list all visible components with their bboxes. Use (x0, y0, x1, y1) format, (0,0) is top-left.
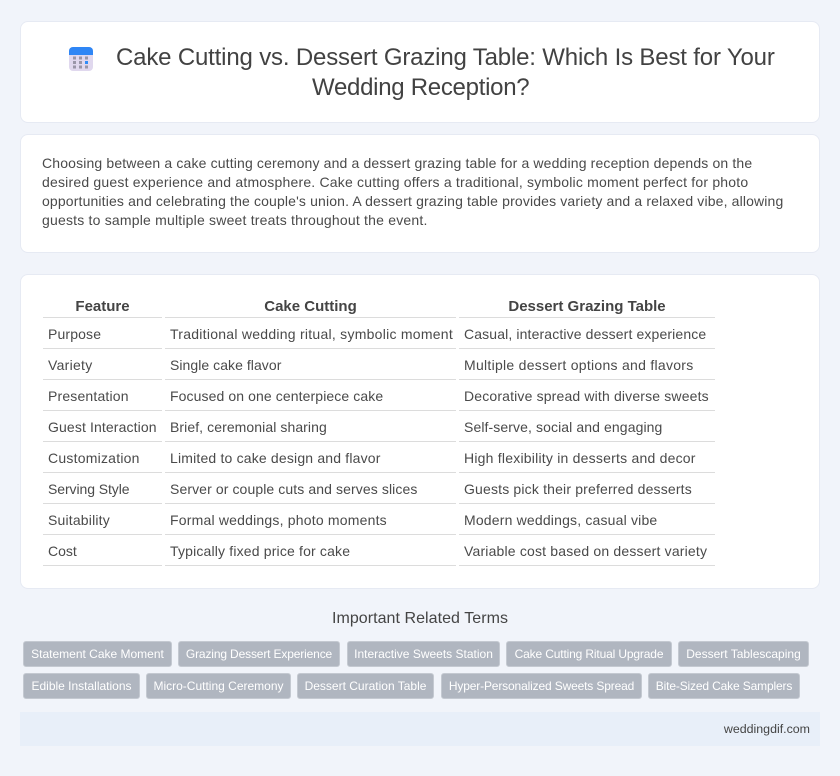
intro text: guests to sample multiple sweet treats throughout the event. (42, 212, 428, 228)
related term chips: Interactive Sweets Station (354, 647, 493, 661)
row: Customization: Customization (48, 450, 140, 466)
related term chips: Bite-Sized Cake Samplers (656, 679, 792, 693)
related terms heading: Important Related Terms (332, 610, 508, 627)
row: Customization: Limited to cake design and flavor (170, 450, 381, 466)
row: Serving Style: Serving Style (48, 481, 129, 497)
icon: calendar (69, 47, 93, 71)
row: Variety (48, 357, 694, 373)
row: Variety: Single cake flavor (170, 357, 281, 373)
row: Suitability: Formal weddings, photo moments (170, 512, 387, 528)
intro card (20, 134, 820, 253)
related term chips: Dessert Curation Table (305, 679, 426, 693)
intro text: desired guest experience and atmosphere. Cake cutting offers a traditional, symbolic moment perfect for photo (42, 174, 748, 190)
row: Purpose: Casual, interactive dessert experience (464, 326, 706, 342)
row: Customization: High flexibility in desserts and decor (464, 450, 696, 466)
row: Serving Style: Guests pick their preferred desserts (464, 481, 692, 497)
row: Purpose: Purpose (48, 326, 101, 342)
related term chips: Grazing Dessert Experience (186, 647, 332, 661)
related term chips: Edible Installations (31, 679, 132, 693)
row: Variety: Multiple dessert options and flavors (464, 357, 694, 373)
footer source: weddingdif.com (724, 722, 810, 736)
related term chips: Statement Cake Moment (31, 647, 164, 661)
table header: Cake Cutting (264, 298, 357, 315)
comparison table (43, 298, 715, 566)
related term chips: Micro-Cutting Ceremony (153, 679, 284, 693)
row: Guest Interaction: Guest Interaction (48, 419, 157, 435)
row: Presentation: Focused on one centerpiece cake (170, 388, 383, 404)
row: Customization (48, 450, 696, 466)
title: Cake Cutting vs. Dessert Grazing Table: Which Is Best for Your (116, 44, 775, 71)
table header: Dessert Grazing Table (508, 298, 666, 315)
table header: Feature (75, 298, 130, 315)
intro text (42, 155, 783, 228)
row: Guest Interaction: Brief, ceremonial sharing (170, 419, 327, 435)
row: Cost: Typically fixed price for cake (170, 543, 350, 559)
row: Serving Style (48, 481, 692, 497)
related term chips: Hyper-Personalized Sweets Spread (449, 679, 634, 693)
title (116, 44, 775, 101)
row: Cost: Variable cost based on dessert variety (464, 543, 707, 559)
row: Presentation: Decorative spread with diverse sweets (464, 388, 709, 404)
row: Guest Interaction: Self-serve, social and engaging (464, 419, 662, 435)
related term chips (23, 641, 809, 699)
related term chips: Cake Cutting Ritual Upgrade (515, 647, 663, 661)
row: Suitability (48, 512, 657, 528)
title: Wedding Reception? (312, 74, 529, 101)
row: Suitability: Modern weddings, casual vibe (464, 512, 657, 528)
row: Purpose (48, 326, 706, 342)
row: Suitability: Suitability (48, 512, 110, 528)
header card (20, 21, 820, 123)
intro text: opportunities and celebrating the couple's union. A dessert grazing table provides variety and a relaxed vibe, allowing (42, 193, 783, 209)
row: Cost (48, 543, 707, 559)
row: Serving Style: Server or couple cuts and serves slices (170, 481, 417, 497)
row: Cost: Cost (48, 543, 77, 559)
row: Purpose: Traditional wedding ritual, symbolic moment (170, 326, 453, 342)
comparison table card (20, 274, 820, 589)
row: Presentation: Presentation (48, 388, 129, 404)
row: Presentation (48, 388, 709, 404)
intro text: Choosing between a cake cutting ceremony and a dessert grazing table for a wedding reception depends on the (42, 155, 752, 171)
row: Variety: Variety (48, 357, 92, 373)
row: Guest Interaction (48, 419, 662, 435)
table header (75, 298, 666, 315)
footer bar (20, 712, 820, 746)
related term chips: Dessert Tablescaping (686, 647, 801, 661)
